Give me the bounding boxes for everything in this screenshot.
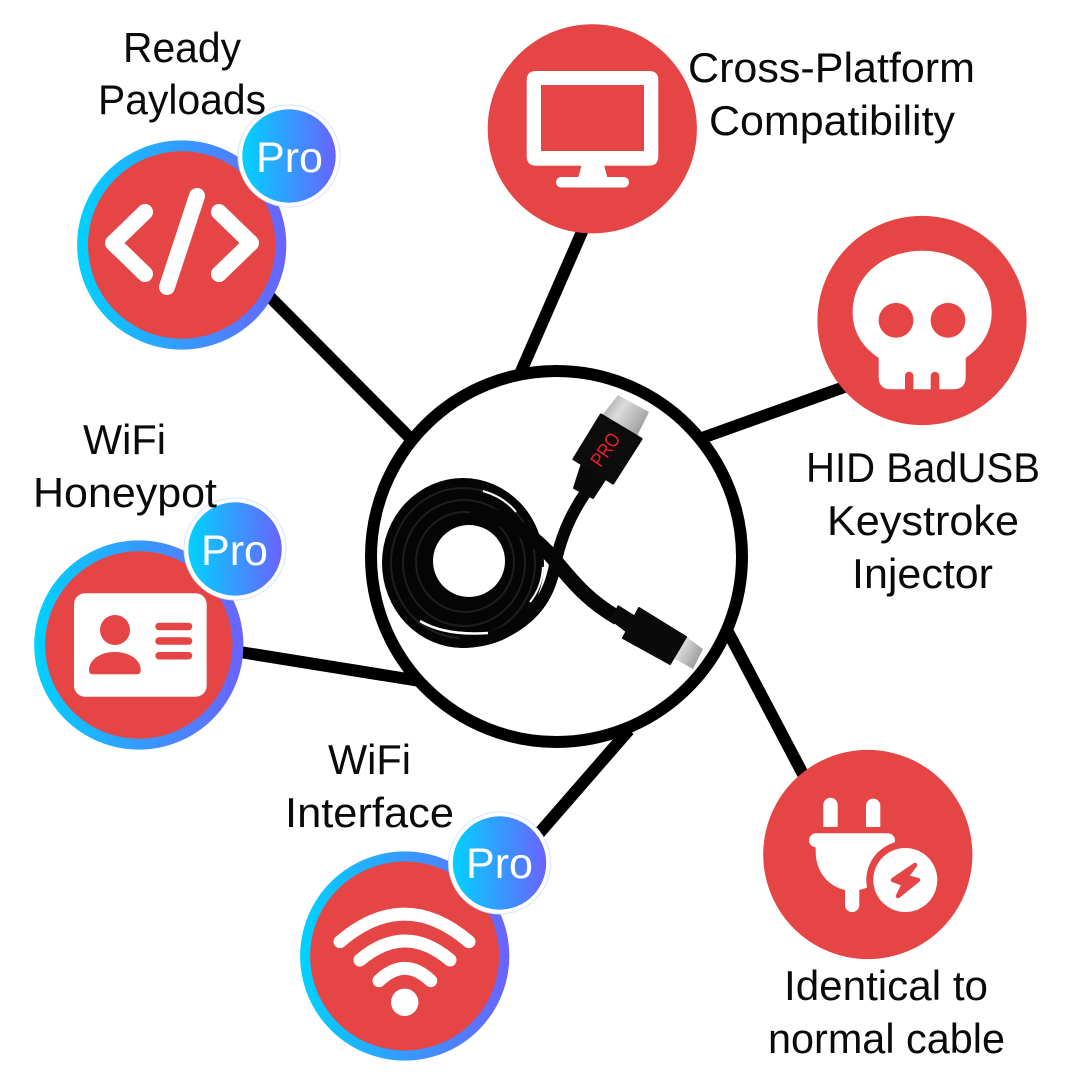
label: WiFi bbox=[83, 416, 166, 463]
node: wifi honeypot bbox=[33, 416, 286, 750]
label: Identical to bbox=[784, 962, 988, 1009]
icon: skull bbox=[817, 216, 1027, 425]
label bbox=[285, 736, 454, 836]
pro badge: Pro bbox=[201, 527, 268, 575]
connector lines bbox=[240, 225, 850, 838]
label: Keystroke bbox=[827, 497, 1019, 544]
label: HID BadUSB bbox=[806, 444, 1040, 491]
cable strands bbox=[420, 491, 618, 642]
pro badge: Pro bbox=[466, 840, 533, 888]
label bbox=[688, 44, 975, 144]
pro badge bbox=[184, 498, 286, 600]
icon: plug bbox=[763, 750, 972, 959]
label bbox=[33, 416, 217, 516]
node: wifi interface bbox=[285, 736, 550, 1061]
node: HID BadUSB keystroke injector bbox=[806, 216, 1040, 597]
bottom USB-C plug bbox=[610, 605, 703, 669]
label: normal cable bbox=[768, 1015, 1005, 1062]
cable coil bbox=[382, 478, 544, 648]
icon: wifi bbox=[300, 851, 509, 1061]
pro badge: Pro bbox=[256, 134, 323, 182]
top USB-C plug bbox=[574, 395, 649, 498]
node: cross-platform compatibility bbox=[488, 24, 975, 233]
center circle with cable photo bbox=[371, 371, 742, 742]
top USB-C plug: PRO bbox=[587, 429, 625, 471]
icon: code bbox=[77, 140, 286, 350]
label: Payloads bbox=[98, 76, 266, 123]
label bbox=[98, 24, 266, 123]
label: Compatibility bbox=[709, 97, 955, 144]
label: Ready bbox=[123, 24, 241, 71]
label: WiFi bbox=[328, 736, 411, 783]
node: identical to normal cable bbox=[763, 750, 1005, 1062]
pro badge bbox=[238, 105, 340, 207]
label: Honeypot bbox=[33, 469, 217, 516]
icon: id card bbox=[34, 540, 243, 750]
label: Interface bbox=[285, 789, 454, 836]
node: ready payloads bbox=[77, 24, 340, 350]
icon: monitor bbox=[488, 24, 697, 233]
label bbox=[768, 962, 1005, 1062]
label bbox=[806, 444, 1040, 597]
label: Injector bbox=[852, 550, 993, 597]
label: Cross-Platform bbox=[688, 44, 975, 91]
pro badge bbox=[448, 812, 550, 914]
